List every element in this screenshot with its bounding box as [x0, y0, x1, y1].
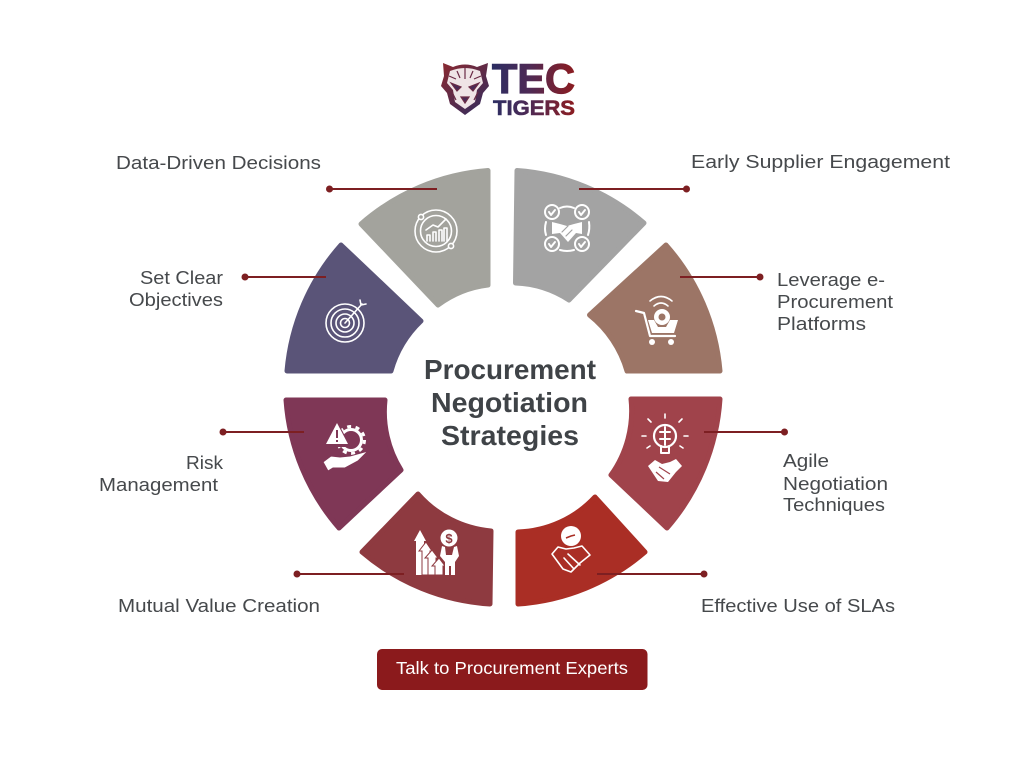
label: Data-Driven Decisions: Data-Driven Decisions	[116, 152, 321, 173]
label: Effective Use of SLAs: Effective Use of SLAs	[701, 595, 895, 616]
icon: risk warning, gear and hand	[323, 421, 368, 471]
label: Leverage e-Procurement Platforms: Leverage e-	[777, 269, 885, 290]
segment: Data-Driven Decisions	[326, 170, 488, 305]
segment: Leverage e-Procurement Platforms	[590, 245, 764, 371]
segment: Mutual Value Creation	[294, 494, 491, 604]
icon: handshake with clock	[552, 526, 590, 572]
segment: Set Clear Objectives	[242, 245, 421, 371]
title: Procurement Negotiation Strategies	[424, 354, 596, 451]
label: Leverage e-Procurement Platforms	[777, 269, 893, 334]
title: Procurement Negotiation Strategies: Strategies	[441, 420, 579, 451]
label: Agile Negotiation Techniques: Techniques	[783, 494, 885, 515]
label: Early Supplier Engagement: Early Supplier Engagement	[691, 151, 950, 172]
leader line	[294, 570, 404, 578]
icon: tiger head	[441, 63, 489, 115]
icon: data analytics	[415, 210, 457, 252]
icon: handshake with checks	[545, 205, 589, 251]
label: Mutual Value Creation: Mutual Value Creation	[118, 595, 320, 616]
segment: Effective Use of SLAs	[518, 497, 708, 604]
segment: Early Supplier Engagement	[516, 170, 690, 300]
icon: growth arrows and person with dollar: $	[445, 531, 453, 546]
button: Talk to Procurement Experts	[377, 649, 648, 690]
label: Set Clear Objectives	[129, 267, 223, 310]
logo wordmark: TEC: TEC	[492, 55, 575, 102]
title: Procurement Negotiation Strategies: Procurement	[424, 354, 596, 385]
leader line	[597, 570, 708, 578]
icon: shopping cart with gear and wifi	[636, 296, 678, 345]
label: Agile Negotiation Techniques: Negotiation	[783, 473, 888, 494]
label: Leverage e-Procurement Platforms: Platforms	[777, 313, 866, 334]
logo wordmark: TIGERS: TIGERS	[493, 97, 575, 120]
leader line	[326, 186, 437, 192]
segment: Risk Management	[220, 400, 401, 528]
icon: growth arrows and person with dollar	[414, 530, 459, 575]
leader line	[704, 428, 788, 436]
label: Risk Management: Risk	[186, 452, 224, 473]
segment: Agile Negotiation Techniques	[611, 399, 788, 528]
title: Procurement Negotiation Strategies: Negotiation	[431, 387, 588, 418]
logo: Tec Tigers	[441, 55, 575, 120]
label: Set Clear Objectives: Set Clear	[140, 267, 223, 288]
icon: target with arrow	[326, 300, 366, 342]
button: Talk to Procurement Experts: Talk to Procurement Experts	[396, 658, 628, 678]
icon: light bulb and handshake	[642, 414, 688, 482]
leader line	[242, 274, 326, 280]
label: Set Clear Objectives: Objectives	[129, 289, 223, 310]
label: Leverage e-Procurement Platforms: Procurement	[777, 291, 893, 312]
leader line	[579, 186, 690, 192]
label: Agile Negotiation Techniques: Agile	[783, 450, 829, 471]
leader line	[220, 428, 304, 436]
label: Agile Negotiation Techniques	[783, 450, 888, 515]
label: Risk Management: Management	[99, 474, 218, 495]
leader line	[680, 274, 764, 280]
label: Risk Management	[99, 452, 224, 495]
